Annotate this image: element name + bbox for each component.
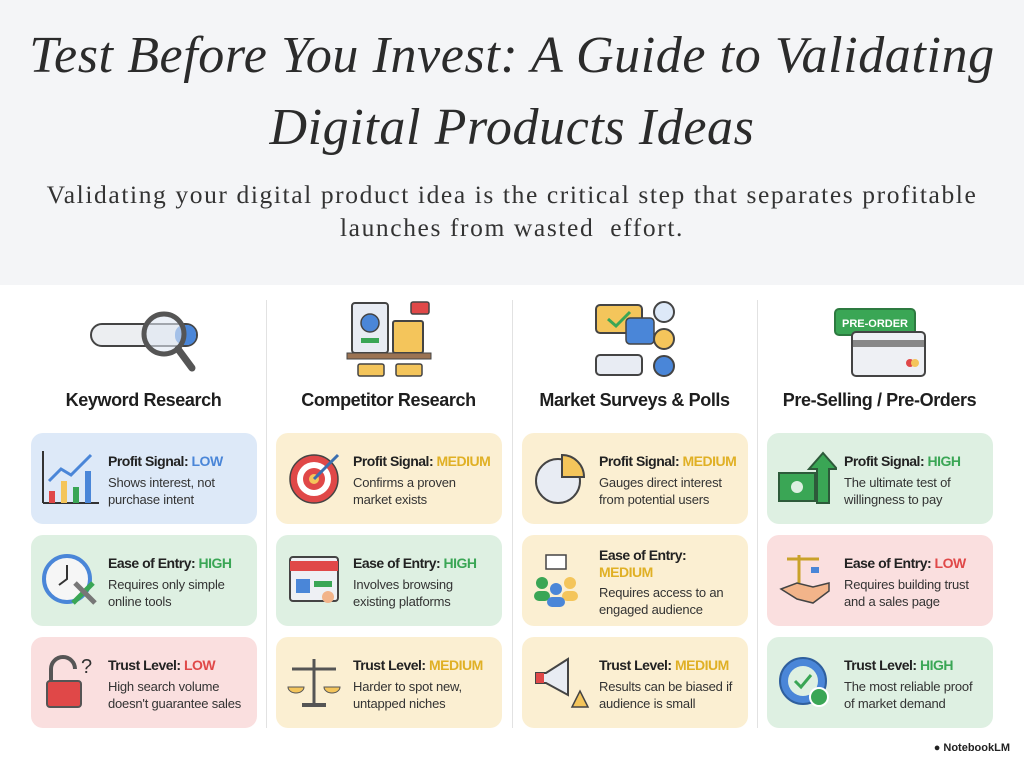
card: keyword trust: ?	[81, 656, 92, 678]
heading: keyword research: Keyword Research	[66, 390, 221, 410]
card: preselling trust: The most reliable proof	[844, 679, 972, 694]
card: competitor ease: Involves browsing	[353, 577, 453, 592]
card: preselling trust: of market demand	[844, 696, 946, 710]
card: keyword profit: Profit Signal: LOW	[108, 453, 223, 469]
card: surveys profit: Gauges direct interest	[599, 475, 722, 490]
card: preselling profit: The ultimate test of	[844, 475, 951, 490]
card: surveys trust: Trust Level: MEDIUM	[599, 657, 729, 673]
card: keyword ease: Ease of Entry: HIGH	[108, 555, 232, 571]
card: competitor profit: Confirms a proven	[353, 475, 456, 490]
logo: ● NotebookLM	[934, 742, 1010, 754]
card: surveys ease: MEDIUM	[599, 564, 653, 580]
card: surveys ease	[522, 535, 748, 626]
card: competitor profit: Profit Signal: MEDIUM	[353, 453, 490, 469]
card: preselling profit	[767, 433, 993, 524]
card: competitor profit: market exists	[353, 492, 427, 506]
card: preselling ease: and a sales page	[844, 594, 940, 608]
subtitle: launches from wasted effort.	[340, 213, 684, 242]
title	[29, 27, 995, 156]
card: surveys trust: Results can be biased if	[599, 679, 732, 694]
card: competitor ease	[276, 535, 502, 626]
card: surveys trust: audience is small	[599, 696, 695, 710]
card: competitor profit	[276, 433, 502, 524]
card: competitor trust	[276, 637, 502, 728]
subtitle: Validating your digital product idea is the critical step that separates profitable	[47, 180, 977, 209]
card: surveys ease: Ease of Entry:	[599, 547, 686, 563]
icon: surveys	[595, 301, 675, 377]
icon: search bar	[90, 312, 198, 372]
card: keyword trust	[31, 637, 257, 728]
card: preselling profit: willingness to pay	[844, 492, 942, 506]
card: keyword profit	[31, 433, 257, 524]
card: keyword profit: Shows interest, not	[108, 475, 215, 490]
card: keyword ease: Requires only simple	[108, 577, 225, 592]
title: Digital Products Ideas	[269, 99, 754, 156]
card: preselling trust: Trust Level: HIGH	[844, 657, 953, 673]
heading: competitor research: Competitor Research	[301, 390, 476, 410]
heading: pre-selling: Pre-Selling / Pre-Orders	[783, 390, 976, 410]
card: keyword trust: doesn't guarantee sales	[108, 696, 241, 710]
card: keyword profit: purchase intent	[108, 492, 194, 506]
card: surveys ease: engaged audience	[599, 602, 703, 616]
card: preselling ease: Ease of Entry: LOW	[844, 555, 966, 571]
card: competitor trust: Harder to spot new,	[353, 679, 462, 694]
card: preselling ease	[767, 535, 993, 626]
card: preselling trust	[767, 637, 993, 728]
card: keyword trust: High search volume	[108, 679, 219, 694]
card: competitor ease: existing platforms	[353, 594, 451, 608]
card: surveys profit: Profit Signal: MEDIUM	[599, 453, 736, 469]
card: preselling ease: Requires building trust	[844, 577, 969, 592]
subtitle	[46, 180, 977, 242]
card: preselling profit: Profit Signal: HIGH	[844, 453, 960, 469]
heading: market surveys: Market Surveys & Polls	[539, 390, 730, 410]
card: surveys ease: Requires access to an	[599, 585, 723, 600]
icon: competitor shelf	[346, 301, 432, 377]
card: competitor trust: Trust Level: MEDIUM	[353, 657, 483, 673]
icon: pre-order card	[834, 308, 926, 377]
card: keyword ease	[31, 535, 257, 626]
icon: pre-order card: PRE-ORDER	[842, 318, 908, 330]
card: surveys profit: from potential users	[599, 492, 709, 506]
card: competitor trust: untapped niches	[353, 696, 445, 710]
card: surveys profit	[522, 433, 748, 524]
card: competitor ease: Ease of Entry: HIGH	[353, 555, 477, 571]
card: surveys trust	[522, 637, 748, 728]
title: Test Before You Invest: A Guide to Validating	[29, 27, 995, 84]
card: keyword ease: online tools	[108, 594, 171, 608]
card: keyword trust: Trust Level: LOW	[108, 657, 215, 673]
